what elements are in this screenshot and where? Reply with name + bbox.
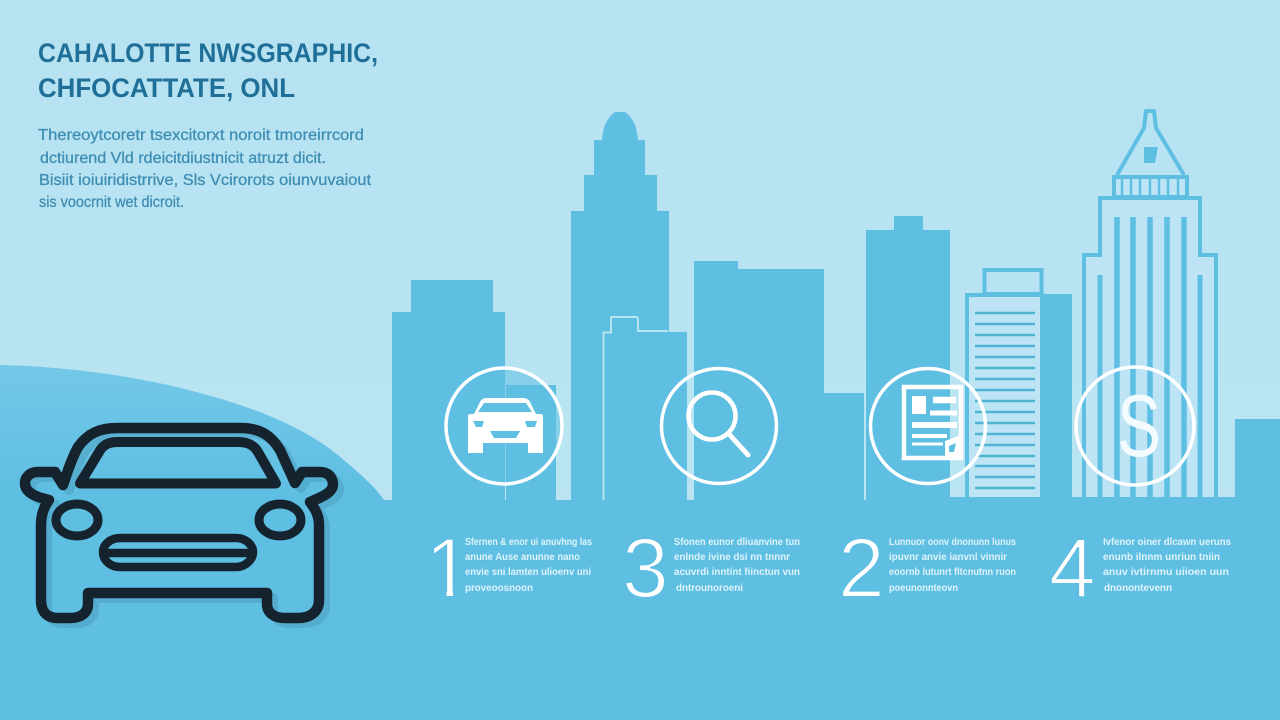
step 2 text: Lunnuor oonv dnonunn lunus: [889, 537, 1016, 548]
building: low stub: [506, 385, 556, 503]
car shadow: [31, 433, 339, 623]
step icon 4: S: [1076, 367, 1194, 485]
step 2 text: eoornb lutunrt fltcnutnn ruon: [889, 567, 1016, 578]
step 1 text: anune Ause anunne nano: [465, 552, 580, 563]
car windshield: [80, 442, 276, 484]
step 2 text: poeunonnteovn: [889, 583, 958, 594]
building: stepped tower: [571, 112, 669, 503]
step 1 text: Sfernen & enor ui anuvhng las: [465, 537, 592, 548]
car right headlight: [259, 504, 301, 536]
title: CHFOCATTATE, ONL: [38, 73, 295, 103]
step 4 number and text: [1049, 521, 1231, 615]
building: far right block: [1235, 419, 1280, 509]
intro text block: [38, 127, 372, 211]
step 3 text: acuvrdi inntint fiinctun vun: [674, 567, 800, 578]
step 2 text: [889, 537, 1016, 594]
step 4 text: [1103, 537, 1231, 594]
intro text block: sis voocrnit wet dicroit.: [39, 194, 184, 211]
building: tall block: [866, 216, 950, 503]
building: left block: [392, 280, 505, 503]
number 4: 4: [1049, 521, 1096, 615]
step 2 text: ipuvnr anvie ianvnl vinnir: [889, 552, 1007, 563]
icon: large car outline: [25, 428, 339, 623]
step 3 text: Sfonen eunor dliuanvine tun: [674, 537, 800, 548]
step 3 text: dntrounoroeni: [676, 583, 743, 594]
car grille: [103, 538, 253, 567]
city skyline: [392, 111, 1280, 509]
step icon 4: S: S: [1117, 376, 1161, 475]
step 2 number and text: [838, 521, 1016, 615]
step 1 number and text: [434, 538, 592, 596]
step 1 text: [465, 537, 592, 594]
building: outlined striped block: [967, 270, 1072, 503]
intro text block: Bisiit ioiuiridistrrive, Sls Vcirorots oiunvuvaiout: [39, 172, 372, 189]
building: front block: [603, 317, 687, 503]
step icon 1: car: [446, 368, 562, 484]
step 1 text: envie sni lamten ulioenv uni: [465, 567, 591, 578]
step 3 text: enlnde ivine dsi nn tnnnr: [674, 552, 790, 563]
number 1: 1: [425, 521, 472, 615]
step icon 3: magnifier: [662, 368, 776, 484]
car body: [25, 428, 333, 618]
intro text block: dctiurend Vld rdeicitdiustnicit atruzt dicit.: [40, 150, 326, 167]
step 4 text: enunb ilnnm unriun tniin: [1103, 552, 1220, 563]
hill curve: [0, 365, 386, 503]
title: CAHALOTTE NWSGRAPHIC,: [38, 38, 378, 68]
step 1 text: proveoosnoon: [465, 583, 533, 594]
step 3 number and text: [622, 521, 800, 615]
number 2: 2: [838, 521, 885, 615]
car left headlight: [56, 504, 98, 536]
step 4 text: anuv ivtirnmu uiioen uun: [1103, 567, 1229, 578]
title: [38, 38, 378, 103]
ground strip right: [950, 497, 1280, 505]
step 4 text: dnonontevenn: [1104, 583, 1172, 594]
number 3: 3: [622, 521, 669, 615]
building: wide block: [694, 261, 824, 503]
building: low right block: [824, 393, 864, 503]
step icon 2: document: [870, 368, 986, 484]
step 4 text: Ivfenor oiner dlcawn ueruns: [1103, 537, 1231, 548]
ground band: [0, 500, 1280, 720]
intro text block: Thereoytcoretr tsexcitorxt noroit tmoreirrcord: [38, 127, 364, 144]
building: art deco skyscraper: [1084, 111, 1216, 503]
step 3 text: [674, 537, 800, 594]
